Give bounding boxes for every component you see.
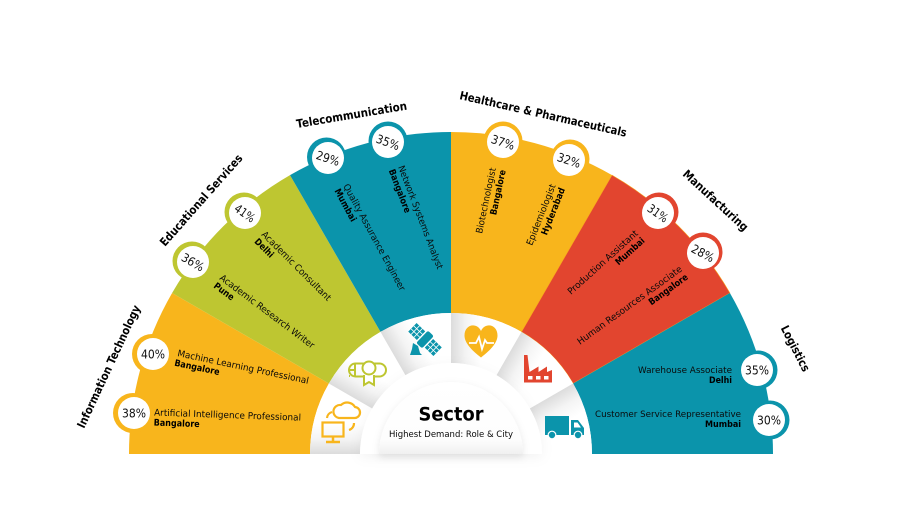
label: Biotechnologist, Bangalore — [474, 166, 509, 237]
panel: Telecommunication — [290, 99, 473, 386]
icon: diploma — [349, 362, 386, 385]
badge: 36%: 36% — [179, 250, 207, 274]
label: Artificial Intelligence Professional, Bangalore: Artificial Intelligence Professional — [154, 408, 301, 424]
label: Human Resources Associate, Bangalore: Bangalore — [647, 272, 690, 308]
badge: 41% — [224, 192, 264, 232]
label: Warehouse Associate, Delhi: Warehouse Associate — [638, 365, 732, 376]
label: Academic Consultant, Delhi: Academic Consultant — [259, 229, 333, 304]
icon: cloud and monitor — [322, 403, 360, 442]
icon: factory — [524, 355, 552, 382]
badge: 29%: 29% — [314, 148, 341, 169]
icon wedge: Information Technology — [310, 384, 372, 454]
panel: Logistics — [519, 293, 813, 476]
label: Warehouse Associate, Delhi — [638, 365, 732, 386]
badge: 35% — [738, 350, 778, 390]
label: Human Resources Associate, Bangalore: Human Resources Associate — [575, 264, 685, 347]
label: Quality Assurance Engineer, Mumbai: Quality Assurance Engineer — [340, 182, 407, 293]
icon wedge: Telecommunication — [380, 297, 473, 386]
heading: Manufacturing: Manufacturing — [680, 167, 751, 234]
heading: Educational Services: Educational Services — [157, 151, 245, 249]
badge: 28%: 28% — [689, 242, 717, 265]
badge: 40%: 40% — [141, 348, 165, 362]
badge: 31% — [640, 192, 678, 232]
heading: Telecommunication: Telecommunication — [295, 99, 408, 131]
center title: Sector — [418, 404, 484, 426]
badge: 37%: 37% — [489, 132, 516, 153]
label: Artificial Intelligence Professional, Bangalore: Bangalore — [154, 417, 200, 430]
center ring — [360, 363, 542, 454]
badge: 32%: 32% — [555, 150, 582, 171]
label: Production Assistant, Mumbai: Production Assistant — [566, 228, 641, 297]
badge: 32% — [550, 140, 590, 178]
icon: truck — [545, 416, 584, 435]
icon: heart with pulse — [464, 325, 498, 358]
badge: 35% — [368, 122, 408, 160]
heading: Information Technology: Information Technology — [74, 303, 144, 430]
badge: 35%: 35% — [374, 132, 401, 153]
icon wedge: Healthcare — [451, 313, 522, 375]
label: Academic Research Writer, Pune: Pune — [211, 281, 236, 303]
panel: Healthcare & Pharmaceuticals — [451, 88, 628, 375]
badge: 38%: 38% — [122, 406, 146, 420]
badge: 40% — [132, 334, 172, 374]
center panel: Sector — [379, 382, 523, 454]
badge: 30% — [750, 400, 790, 440]
badge: 36% — [172, 242, 212, 280]
badge: 30%: 30% — [757, 414, 781, 428]
panel: Educational Services — [157, 151, 418, 415]
label: Biotechnologist, Bangalore: Biotechnologist — [474, 166, 499, 235]
label: Machine Learning Professional, Bangalore: Bangalore — [173, 358, 221, 378]
label: Epidemiologist, Hyderabad: Hyderabad — [539, 186, 568, 237]
label: Customer Service Representative, Mumbai: Customer Service Representative — [595, 409, 741, 420]
heading: Healthcare & Pharmaceuticals: Healthcare & Pharmaceuticals — [458, 88, 628, 140]
icon: satellite — [407, 321, 443, 358]
label: Academic Research Writer, Pune: Academic Research Writer — [217, 273, 317, 351]
badge: 28% — [684, 232, 722, 272]
label: Quality Assurance Engineer, Mumbai: Mumbai — [332, 187, 358, 224]
badge: 41%: 41% — [232, 201, 258, 225]
icon wedge: Educational Services — [329, 322, 418, 415]
icon: truck wheels — [548, 431, 582, 439]
label: Warehouse Associate, Delhi: Delhi — [709, 375, 732, 386]
icon wedge: Logistics — [519, 384, 608, 476]
label: Machine Learning Professional, Bangalore: Machine Learning Professional — [176, 348, 310, 387]
badge: 37% — [484, 122, 522, 160]
label: Customer Service Representative, Mumbai: Mumbai — [705, 419, 741, 430]
label: Epidemiologist, Hyderabad: Epidemiologist — [525, 182, 559, 247]
badge: 38% — [113, 393, 153, 433]
label: Biotechnologist, Bangalore: Bangalore — [488, 169, 509, 216]
label: Network Systems Analyst, Bangalore: Bangalore — [386, 168, 413, 215]
label: Customer Service Representative, Mumbai — [595, 409, 741, 430]
badge: 29% — [307, 138, 346, 176]
label: Academic Consultant, Delhi: Delhi — [252, 236, 276, 260]
badge: 35%: 35% — [745, 364, 769, 378]
badge: 31%: 31% — [645, 201, 671, 225]
panel: Manufacturing — [490, 167, 751, 421]
label: Network Systems Analyst, Bangalore: Network Systems Analyst — [395, 164, 445, 271]
icon wedge: Manufacturing — [490, 332, 583, 421]
panel: Information Technology — [74, 293, 372, 454]
label: Artificial Intelligence Professional, Bangalore — [154, 408, 301, 434]
label: Production Assistant, Mumbai: Mumbai — [613, 236, 647, 268]
center subtitle: Highest Demand: Role & City — [389, 429, 514, 440]
heading: Logistics: Logistics — [778, 323, 813, 374]
